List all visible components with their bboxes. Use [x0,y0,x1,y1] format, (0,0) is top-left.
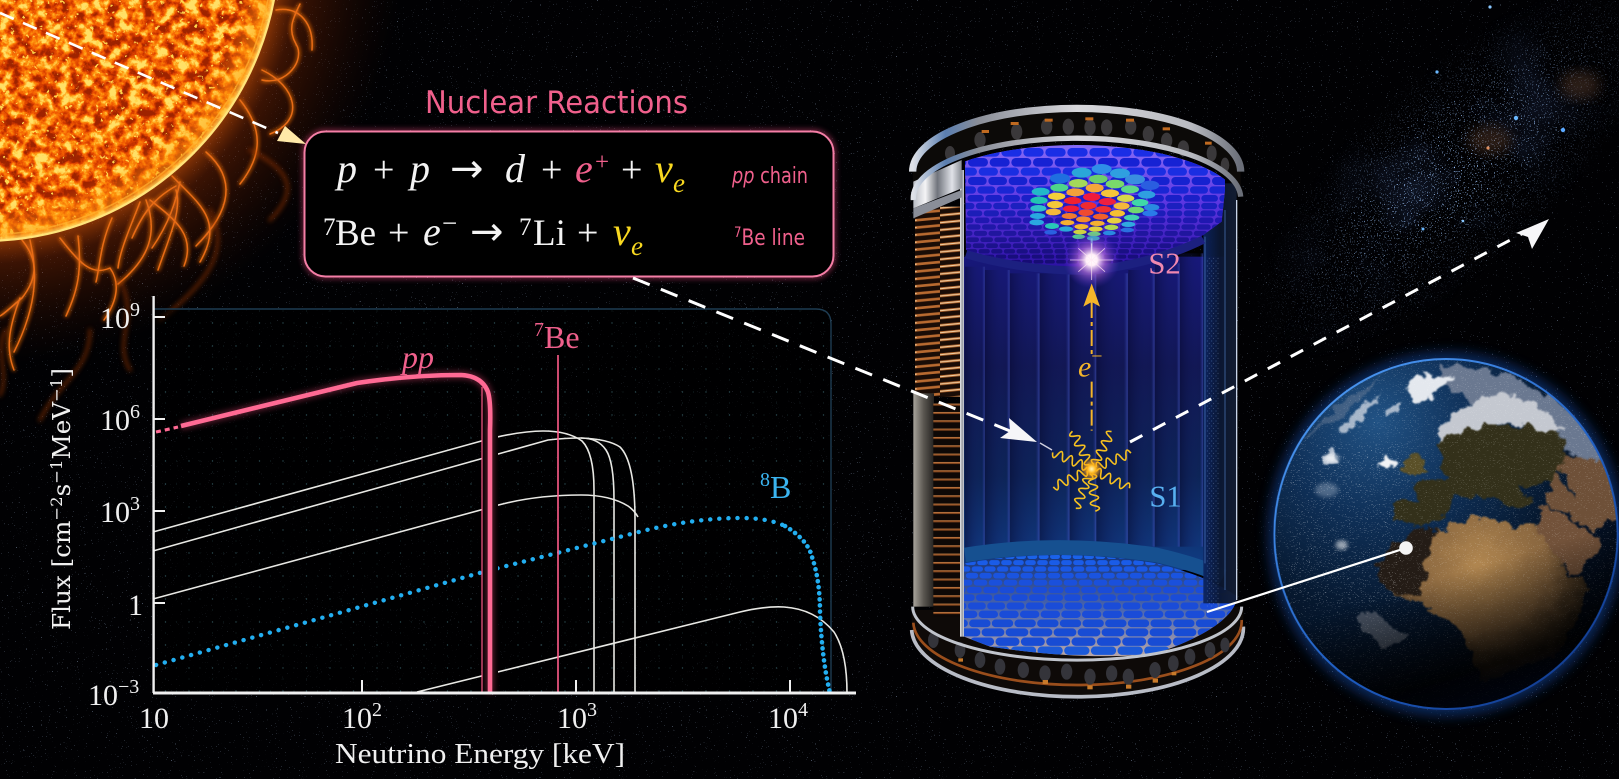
equation: 7Be line: Be [335,213,376,254]
arrow: reactions box to detector [633,278,1052,450]
equation: 7Be line: − [442,208,457,238]
x tick labels: 10 [139,702,169,735]
label: S1: S1 [1149,480,1182,514]
S2 flash [1063,232,1120,288]
equation: pp chain: d [505,146,526,191]
y axis title: s [48,484,76,496]
equation: 7Be line: e [423,209,441,254]
upper PMT band [913,108,1241,218]
y tick labels: 6 [130,401,140,423]
heat map cells [1029,164,1159,241]
white spectra curves [153,431,847,693]
equation: 7Be line: 7 [519,214,532,241]
pp spectrum [156,375,490,693]
equation: 7Be line: + [388,212,409,254]
arrow: sun to reactions box [0,13,306,144]
equation: 7Be line: ν [613,209,631,254]
solar flares [0,4,312,420]
x tick labels: 3 [587,699,597,721]
chart: neutrino flux vs energy [47,296,856,770]
y axis title: −1 [47,459,66,484]
earth [1268,352,1619,716]
equation: pp chain: + [595,149,609,176]
y tick labels [88,299,143,712]
northern ice and clouds [1300,363,1619,647]
y axis title: Flux [cm [48,523,76,630]
back wall panels [964,253,1224,570]
asia [1547,450,1619,530]
panel: nuclear reactions box [304,132,834,276]
y axis title: −2 [47,496,66,521]
y axis title: ] [48,368,76,378]
equation: 7Be line: 7 [323,214,336,241]
equation: pp chain: ν [655,146,673,191]
label: pp chain: pp chain [731,164,808,189]
equation: pp chain: + [621,149,642,191]
bottom PMT array [913,543,1242,663]
title: Nuclear Reactions: Nuclear Reactions [425,85,688,121]
y tick labels: 10 [88,679,118,712]
equation: 7Be line: e [631,231,643,261]
curve label: 8B: B [770,469,791,505]
equation: pp chain: p [334,146,357,191]
curve label: 8B: 8 [760,469,770,491]
curve label: pp: pp [400,339,434,375]
equation: 7Be line: + [577,212,598,254]
equation: 7Be line: → [470,209,504,255]
y axis title: MeV [48,401,76,459]
solar disc [0,0,279,241]
x tick labels: 10 [768,702,798,735]
y tick labels: 10 [100,496,130,529]
right column: transparent shell [1203,183,1237,607]
globe surface [1270,357,1619,713]
y axis title: −1 [47,378,66,402]
y tick labels: 1 [128,589,143,622]
equation: pp chain: p [407,146,430,191]
equation: pp chain: e [673,168,685,198]
electron drift arrow [1083,283,1100,431]
axes with ticks [153,296,856,693]
y tick labels: 3 [130,493,140,515]
left column: copper coil [913,170,964,637]
x tick labels [139,699,808,735]
y tick labels: −3 [118,676,139,698]
y tick labels: 9 [130,299,140,321]
curve label: 7Be: 7 [534,319,544,341]
arabia [1540,503,1602,577]
equation: pp chain: e [575,146,593,191]
arrow: detector outgoing neutrino [1130,219,1549,442]
label: 7Be line: 7 [734,225,742,241]
equation: pp chain [334,146,685,198]
sun with flares [0,0,403,420]
x tick labels: 10 [342,702,372,735]
chart frame and grid [154,309,831,693]
8B dotted spectrum [156,518,830,693]
x tick labels: 4 [798,699,808,721]
europe [1393,425,1567,528]
lower PMT band [912,607,1243,697]
7Be line spectrum [557,355,559,693]
x tick labels: 2 [372,699,382,721]
label: electron: − [1091,346,1103,368]
equation: pp chain: + [373,149,394,191]
africa [1377,517,1587,683]
x axis title: Neutrino Energy [keV] [335,738,625,770]
equation: pp chain: → [450,146,484,192]
pointer: earth location to detector [1207,541,1413,612]
equation: pp chain: + [541,149,562,191]
detector: cut-away cylinder [912,108,1243,697]
night shadow [1308,538,1616,708]
y tick labels: 10 [100,404,130,437]
label: S2: S2 [1148,246,1181,280]
S1 scintillation burst [1051,429,1133,512]
label: electron: e [1078,351,1091,384]
y tick labels: 10 [100,302,130,335]
label: 7Be line: Be line [742,226,805,251]
equation: 7Be line: Li [533,213,566,254]
top PMT array with heat map [913,138,1241,271]
curve label: 7Be: Be [544,319,580,355]
clouds speck layer [1273,358,1619,712]
equation: 7Be line [323,208,643,261]
x tick labels: 10 [557,702,587,735]
